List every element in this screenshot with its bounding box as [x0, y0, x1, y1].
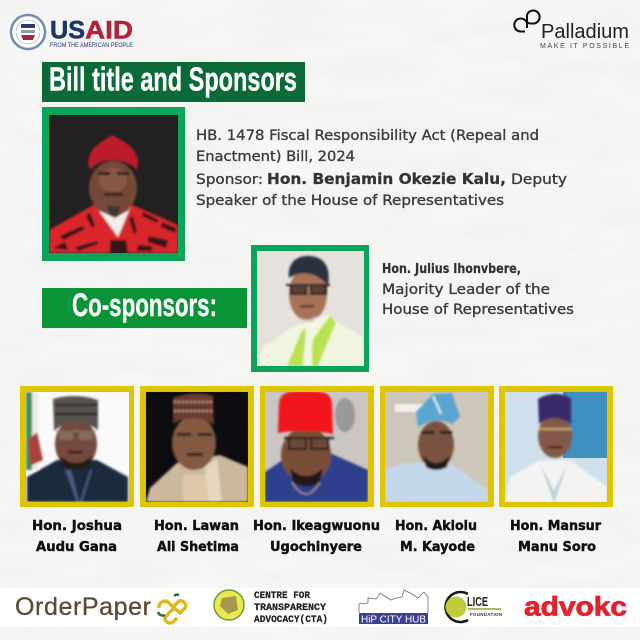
heading: Co-sponsors: Co-sponsors: [72, 287, 217, 323]
logo: Palladium: MAKE IT POSSIBLE [540, 43, 629, 50]
logo: advokc: advokc [524, 592, 627, 622]
logo: USAID [11, 15, 134, 49]
text block: bill description and sponsor: Deputy [511, 172, 567, 188]
logo: Centre for Transparency Advocacy: ADVOCACY(CTA) [254, 614, 328, 626]
logo: Palladium [514, 11, 629, 50]
portrait: Lawan Ali Shetima [140, 386, 254, 507]
caption: Mansur Manu Soro: Manu Soro [518, 539, 596, 555]
text block: Julius Ihonvbere role [382, 261, 574, 318]
text block: Julius Ihonvbere role: House of Representatives [382, 302, 574, 318]
text block: bill description and sponsor: Enactment) Bill, 2024 [196, 149, 355, 165]
text block: bill description and sponsor: Sponsor: [196, 172, 263, 188]
caption: Lawan Ali Shetima: Ali Shetima [157, 539, 239, 555]
logo: Centre for Transparency Advocacy [214, 590, 328, 626]
logo: HiP City Hub [359, 590, 428, 626]
caption: Joshua Audu Gana [32, 518, 122, 555]
logo: Palladium: Palladium [541, 21, 629, 43]
logo: Centre for Transparency Advocacy: TRANSPARENCY [254, 603, 326, 614]
portrait: Mansur Manu Soro [499, 386, 613, 507]
caption: Lawan Ali Shetima [154, 518, 239, 555]
text block: Julius Ihonvbere role: Majority Leader of the [382, 282, 550, 298]
logo: Clice Foundation: LICE [467, 594, 488, 609]
logo: Clice Foundation: FOUNDATION [470, 612, 502, 617]
portrait: Benjamin Okezie Kalu [42, 107, 185, 261]
caption: Akiolu M. Kayode: Hon. Akiolu [395, 518, 477, 534]
footer band with partner logos [0, 588, 640, 627]
text block: bill description and sponsor: HB. 1478 Fiscal Responsibility Act (Repeal and [196, 128, 539, 144]
logo: USAID: AID [85, 16, 133, 44]
portrait: Julius Ihonvbere [251, 245, 369, 372]
caption: Ikeagwuonu Ugochinyere: Ugochinyere [270, 539, 362, 555]
caption: Ikeagwuonu Ugochinyere: Hon. Ikeagwuonu [253, 518, 380, 534]
logo: Centre for Transparency Advocacy: CENTRE FOR [254, 591, 310, 602]
text block: Julius Ihonvbere role: Hon. Julius Ihonvbere, [382, 261, 521, 277]
caption: Akiolu M. Kayode [395, 518, 477, 555]
logo: OrderPaper: OrderPaper [15, 593, 151, 621]
logo: USAID: US [50, 16, 85, 44]
logo: USAID: FROM THE AMERICAN PEOPLE [50, 42, 134, 49]
heading: Bill title and Sponsors [42, 60, 305, 102]
caption: Akiolu M. Kayode: M. Kayode [400, 539, 475, 555]
heading: Bill title and Sponsors: Bill title and Sponsors [49, 60, 297, 98]
heading: Co-sponsors [42, 287, 247, 328]
caption: Joshua Audu Gana: Audu Gana [36, 539, 117, 555]
caption: Lawan Ali Shetima: Hon. Lawan [154, 518, 239, 534]
logo: Clice Foundation [446, 592, 502, 622]
portrait: Joshua Audu Gana [20, 386, 134, 507]
text block: bill description and sponsor: Speaker of the House of Representatives [196, 193, 504, 209]
caption: Joshua Audu Gana: Hon. Joshua [32, 518, 122, 534]
portrait: Akiolu M. Kayode [380, 386, 494, 507]
caption: Mansur Manu Soro: Hon. Mansur [510, 518, 601, 534]
caption: Ikeagwuonu Ugochinyere [253, 518, 380, 555]
text block: bill description and sponsor [196, 128, 567, 209]
portrait: Ikeagwuonu Ugochinyere [260, 386, 374, 507]
caption: Mansur Manu Soro [510, 518, 601, 555]
logo: HiP City Hub: HiP CITY HUB [361, 614, 426, 626]
text block: bill description and sponsor: Hon. Benjamin Okezie Kalu, [267, 170, 506, 188]
